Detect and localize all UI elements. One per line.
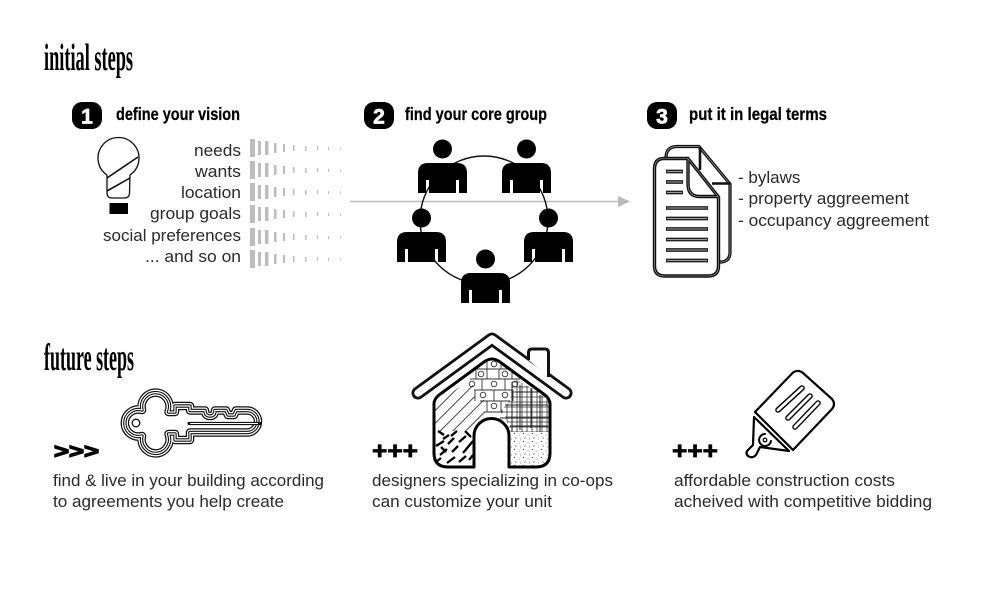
list of vision items: location [181,183,241,202]
description: designers [372,471,613,511]
list of legal documents: - occupancy aggreement [738,211,929,230]
house wall patterns [436,360,548,466]
list of vision items: ... and so on [145,247,241,266]
badge: number 3 [647,102,677,129]
description: construction costs: acheived with competitive bidding [674,492,932,511]
list of legal documents: - bylaws [738,168,800,187]
description: construction costs [674,471,932,511]
panel: step 2 find your core group [364,102,573,303]
step 2 title: find your core group [405,104,547,124]
house roof [418,339,566,393]
icon: light bulb [98,138,139,214]
icon: stacked documents [654,146,730,276]
description: find and live: to agreements you help create [53,492,284,511]
list of vision items [103,141,241,266]
person top right [502,140,551,193]
description: construction costs: affordable construction costs [674,471,895,490]
arrow: timeline through the initial steps [350,196,630,207]
person middle left [397,208,446,262]
description: designers: designers specializing in co-ops [372,471,613,490]
icon: marker pen [746,371,834,457]
badge: number 2 [364,102,394,129]
list of vision items: group goals [150,204,241,223]
person bottom [461,250,510,303]
panel: future step, find and live [53,393,324,511]
badge: number 3: 3 [656,106,668,128]
list of legal documents: - property aggreement [738,189,909,208]
list of vision items: social preferences [103,226,241,245]
panel: future step, construction costs [672,371,932,511]
badge: number 1: 1 [81,106,93,128]
panel: step 1 define your vision [72,102,341,268]
list of vision items: needs [194,141,241,160]
text: initial steps [44,37,133,79]
fading bars beside the list [250,139,341,268]
icon: circle of five people [397,140,573,303]
black dash pattern [436,431,473,463]
description: designers: can customize your unit [372,492,552,511]
symbol: plus signs: +++ [372,438,418,465]
house outline [434,359,550,467]
brick pattern [469,360,520,412]
text: future steps [44,337,134,379]
step 3 title: put it in legal terms [689,104,827,124]
badge: number 1 [72,102,102,129]
description: find and live [53,471,324,511]
list of vision items: wants [194,162,241,181]
list of legal documents [738,168,929,230]
panel: step 3 put it in legal terms [647,102,929,276]
person top left [418,140,467,193]
description: find and live: find & live in your building according [53,471,324,490]
icon: patterned house [418,339,566,468]
badge: number 2: 2 [373,106,385,128]
icon: key [125,393,260,453]
step 1 title: define your vision [116,104,240,124]
panel: future step, designers [372,339,613,511]
symbol: plus signs: +++ [672,438,718,465]
person middle right [524,208,573,262]
symbol: chevrons: >>> [54,441,99,463]
